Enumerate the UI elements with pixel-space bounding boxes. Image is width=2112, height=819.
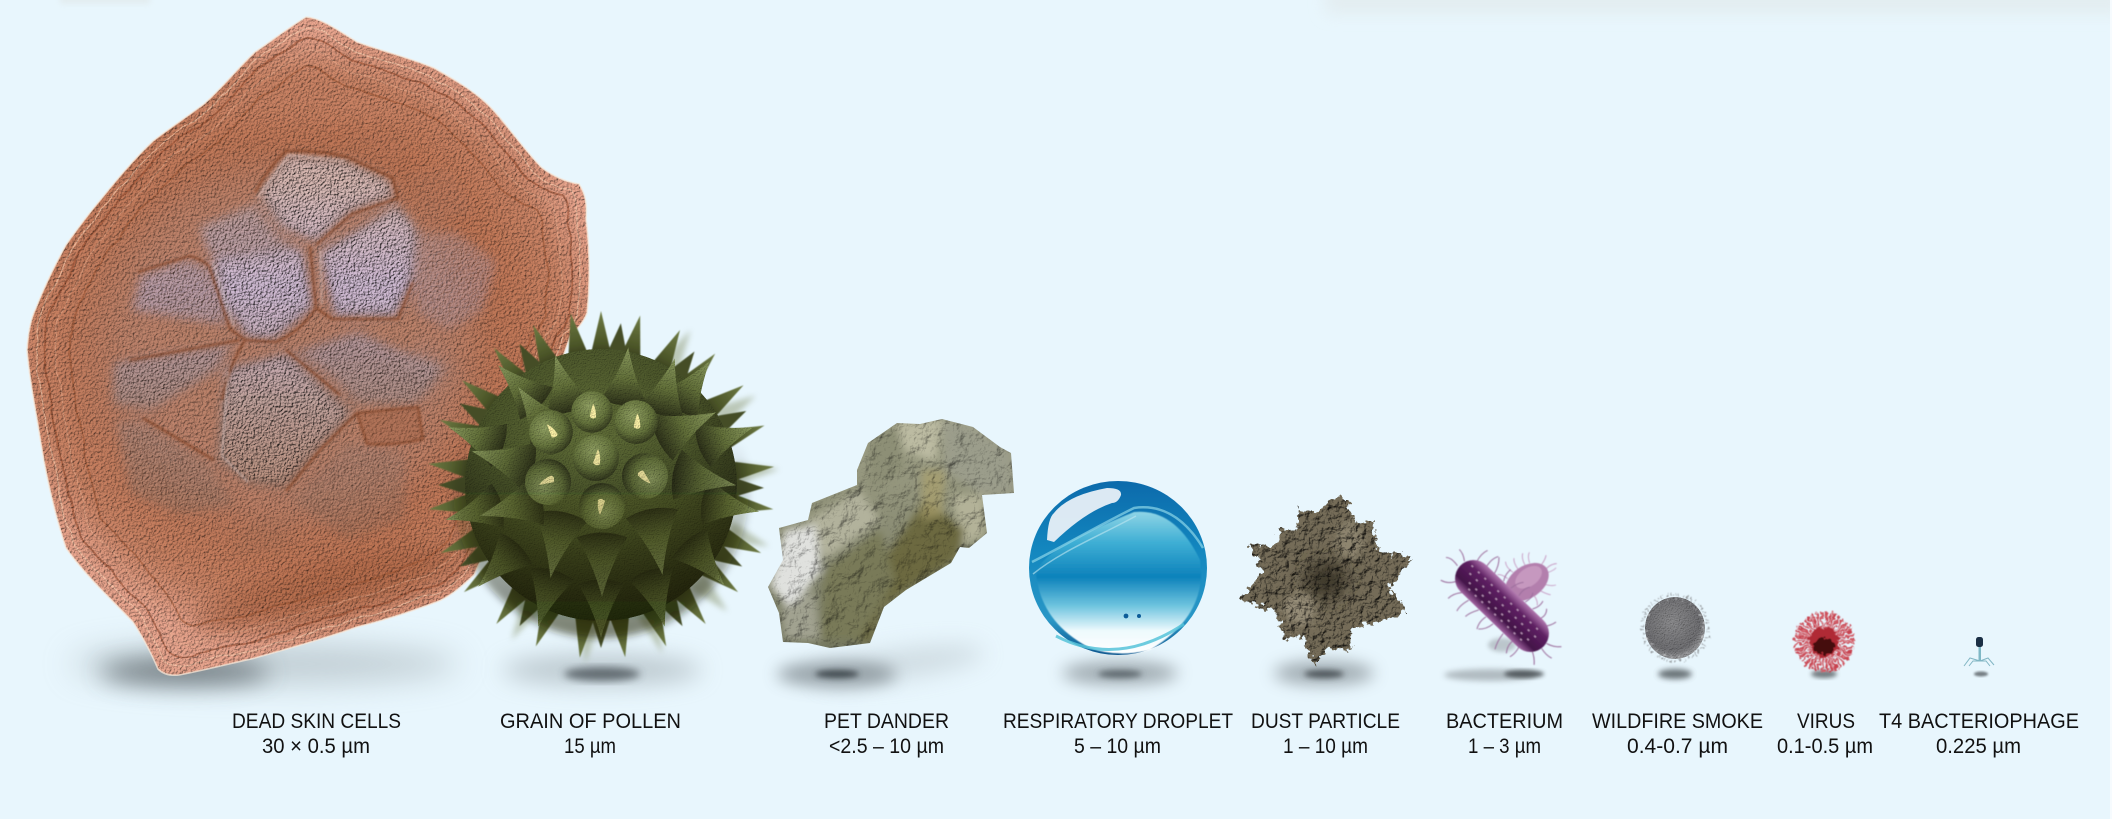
label: T4 bacteriophage <box>1879 710 2079 758</box>
icon: pet dander <box>768 419 1014 648</box>
label: pet dander: PET DANDER <box>824 710 949 733</box>
label: pet dander <box>824 710 949 758</box>
label: respiratory droplet: 5 – 10 µm <box>1074 735 1161 758</box>
label: T4 bacteriophage: 0.225 µm <box>1936 735 2021 758</box>
droplet highlight <box>1047 488 1121 542</box>
label: dust particle <box>1251 710 1400 758</box>
label: virus <box>1777 710 1873 758</box>
label: bacterium: BACTERIUM <box>1446 710 1563 733</box>
label: T4 bacteriophage: T4 BACTERIOPHAGE <box>1879 710 2079 733</box>
label: dead skin cells: 30 × 0.5 µm <box>262 735 370 758</box>
icon: T4 bacteriophage <box>1964 637 1994 666</box>
label: dust particle: DUST PARTICLE <box>1251 710 1400 733</box>
label: bacterium: 1 – 3 µm <box>1468 735 1541 758</box>
shadow: respiratory droplet <box>1062 661 1178 685</box>
label: bacterium <box>1446 710 1563 758</box>
shadow: dust particle <box>1274 661 1374 685</box>
shadow: bacterium <box>1444 638 1544 681</box>
label: respiratory droplet: RESPIRATORY DROPLET <box>1003 710 1233 733</box>
shadow: pet dander <box>777 638 986 690</box>
label: virus: VIRUS <box>1797 710 1855 733</box>
shadow: pollen grain <box>502 655 702 685</box>
icon: pollen grain <box>427 311 780 664</box>
icon: bacterium <box>1424 531 1577 682</box>
label: virus: 0.1-0.5 µm <box>1777 735 1873 758</box>
label: pet dander: <2.5 – 10 µm <box>829 735 944 758</box>
label: dead skin cells: DEAD SKIN CELLS <box>232 710 401 733</box>
icon: respiratory droplet <box>1029 481 1207 655</box>
icon: dead skin cell <box>27 17 589 675</box>
shadow: dead skin cell <box>70 644 460 685</box>
label: respiratory droplet <box>1003 710 1233 758</box>
label: grain of pollen: 15 µm <box>564 735 616 758</box>
shadow: virus <box>1811 670 1837 678</box>
shadow: wildfire smoke <box>1658 669 1692 679</box>
label: grain of pollen: GRAIN OF POLLEN <box>500 710 681 733</box>
icon: wildfire smoke particle <box>1642 595 1708 661</box>
label: grain of pollen <box>500 710 681 758</box>
label: wildfire smoke: 0.4-0.7 µm <box>1627 735 1728 758</box>
label: wildfire smoke: WILDFIRE SMOKE <box>1592 710 1763 733</box>
label: dust particle: 1 – 10 µm <box>1283 735 1368 758</box>
label: wildfire smoke <box>1592 710 1763 758</box>
icon: virus <box>1802 620 1846 664</box>
label: dead skin cells <box>232 710 401 758</box>
shadow: T4 bacteriophage <box>1974 672 1988 676</box>
icon: dust particle <box>1240 497 1412 665</box>
